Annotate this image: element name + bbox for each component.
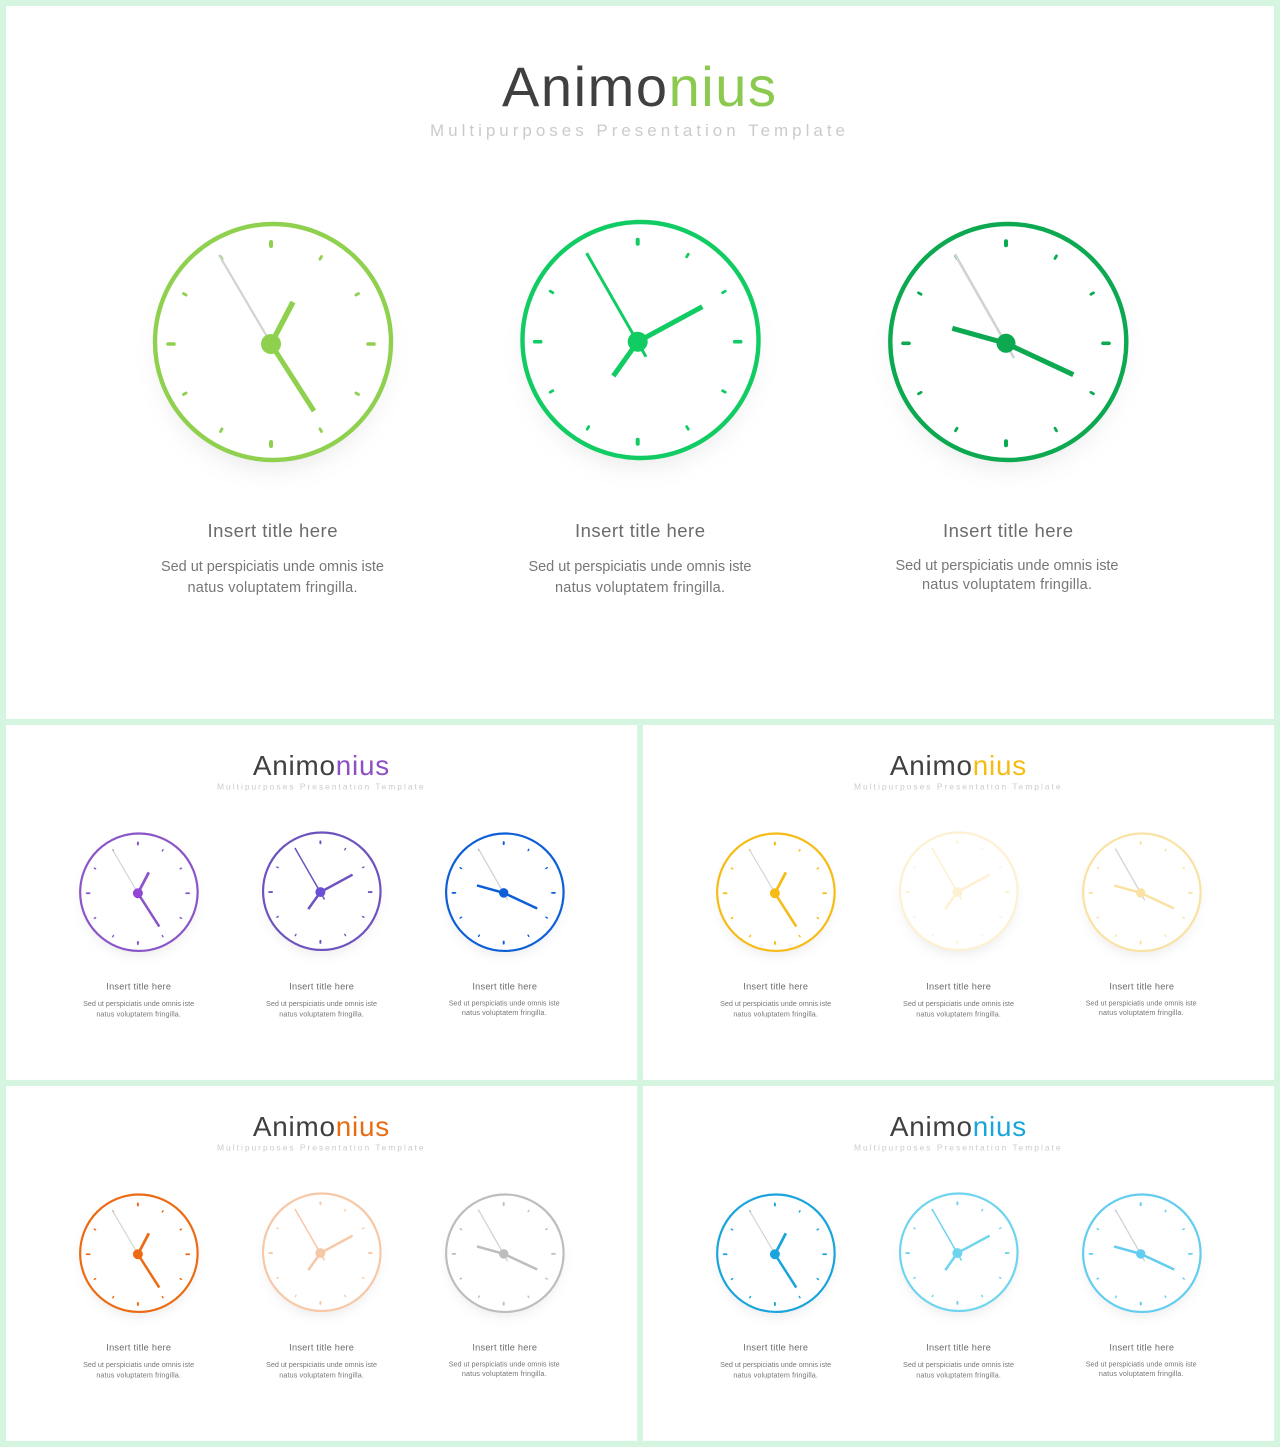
- caption 2: Insert title here: [575, 520, 705, 541]
- panel: yellow slide: [643, 725, 1274, 1080]
- caption 1: Sed ut perspiciatis unde omnis iste: [720, 1360, 831, 1369]
- caption 2: Sed ut perspiciatis unde omnis iste: [903, 999, 1014, 1008]
- subtitle: Multipurposes Presentation Template: [430, 121, 845, 140]
- caption 2: [903, 981, 1014, 1019]
- caption 2: Insert title here: [289, 1342, 354, 1352]
- clock: grey: [446, 1194, 564, 1314]
- caption 3: [896, 520, 1118, 593]
- clock: emerald: [522, 222, 758, 462]
- caption 1: [720, 1342, 831, 1380]
- caption 2: [528, 520, 752, 596]
- caption 1: [83, 981, 194, 1019]
- caption 3: Sed ut perspiciatis unde omnis iste: [896, 558, 1118, 574]
- caption 2: Sed ut perspiciatis unde omnis iste: [266, 999, 377, 1008]
- title: Animonius: [890, 1111, 1026, 1142]
- caption 1: Insert title here: [106, 1342, 171, 1352]
- clock: light blue: [1083, 1194, 1201, 1314]
- caption 1: Sed ut perspiciatis unde omnis iste: [83, 1360, 194, 1369]
- clock: dark green: [890, 224, 1126, 463]
- clock: violet: [80, 833, 198, 953]
- caption 2: [903, 1342, 1014, 1380]
- caption 3: [1086, 1342, 1197, 1378]
- caption 3: Insert title here: [472, 1342, 537, 1352]
- caption 2: Sed ut perspiciatis unde omnis iste: [903, 1360, 1014, 1369]
- caption 2: [266, 981, 377, 1019]
- caption 2: natus voluptatem fringilla.: [916, 1371, 1001, 1380]
- caption 1: natus voluptatem fringilla.: [96, 1010, 181, 1019]
- panel: blue slide: [643, 1086, 1274, 1441]
- clock: pale yellow: [1083, 833, 1201, 953]
- caption 3: natus voluptatem fringilla.: [462, 1369, 547, 1378]
- caption 1: Insert title here: [743, 1342, 808, 1352]
- subtitle: Multipurposes Presentation Template: [854, 782, 1061, 792]
- caption 3: Sed ut perspiciatis unde omnis iste: [449, 999, 560, 1008]
- subtitle: Multipurposes Presentation Template: [854, 1143, 1061, 1153]
- caption 1: natus voluptatem fringilla.: [188, 580, 358, 596]
- caption 1: natus voluptatem fringilla.: [96, 1371, 181, 1380]
- caption 3: Insert title here: [1109, 981, 1174, 991]
- caption 3: [1086, 981, 1197, 1017]
- caption 1: natus voluptatem fringilla.: [733, 1371, 818, 1380]
- caption 3: natus voluptatem fringilla.: [1099, 1369, 1184, 1378]
- caption 1: natus voluptatem fringilla.: [733, 1010, 818, 1019]
- title: Animonius: [253, 750, 389, 781]
- caption 3: Insert title here: [943, 520, 1073, 541]
- title: Animonius: [890, 750, 1026, 781]
- caption 2: natus voluptatem fringilla.: [279, 1371, 364, 1380]
- caption 3: natus voluptatem fringilla.: [1099, 1008, 1184, 1017]
- caption 3: Sed ut perspiciatis unde omnis iste: [449, 1360, 560, 1369]
- clock: orange: [80, 1194, 198, 1314]
- caption 1: [720, 981, 831, 1019]
- caption 3: Insert title here: [472, 981, 537, 991]
- caption 2: Insert title here: [289, 981, 354, 991]
- clock: blue: [446, 833, 564, 953]
- subtitle: Multipurposes Presentation Template: [217, 1143, 424, 1153]
- caption 1: Insert title here: [743, 981, 808, 991]
- clock: light cyan: [900, 1194, 1018, 1313]
- caption 3: [449, 1342, 560, 1378]
- caption 1: Sed ut perspiciatis unde omnis iste: [83, 999, 194, 1008]
- clock: light green: [155, 224, 391, 464]
- caption 1: Insert title here: [106, 981, 171, 991]
- caption 1: Insert title here: [208, 520, 338, 541]
- caption 2: [266, 1342, 377, 1380]
- title: Animonius: [253, 1111, 389, 1142]
- caption 1: [83, 1342, 194, 1380]
- caption 1: [161, 520, 384, 596]
- caption 1: Sed ut perspiciatis unde omnis iste: [720, 999, 831, 1008]
- caption 3: [449, 981, 560, 1017]
- clock: pale cream: [900, 833, 1018, 952]
- subtitle: Multipurposes Presentation Template: [217, 782, 424, 792]
- caption 2: Insert title here: [926, 981, 991, 991]
- panel: main green slide: [6, 6, 1274, 719]
- caption 3: Insert title here: [1109, 1342, 1174, 1352]
- caption 3: Sed ut perspiciatis unde omnis iste: [1086, 1360, 1197, 1369]
- clock: indigo: [263, 833, 381, 952]
- panel: orange slide: [6, 1086, 637, 1441]
- clock: sky blue: [717, 1194, 835, 1314]
- caption 2: natus voluptatem fringilla.: [916, 1010, 1001, 1019]
- clock: peach: [263, 1194, 381, 1313]
- caption 3: natus voluptatem fringilla.: [922, 577, 1092, 593]
- caption 2: Sed ut perspiciatis unde omnis iste: [266, 1360, 377, 1369]
- caption 2: natus voluptatem fringilla.: [555, 580, 725, 596]
- caption 1: Sed ut perspiciatis unde omnis iste: [161, 559, 384, 575]
- caption 3: Sed ut perspiciatis unde omnis iste: [1086, 999, 1197, 1008]
- clock: amber: [717, 833, 835, 953]
- caption 2: natus voluptatem fringilla.: [279, 1010, 364, 1019]
- panel: purple slide: [6, 725, 637, 1080]
- caption 2: Insert title here: [926, 1342, 991, 1352]
- title: Animonius: [502, 55, 776, 118]
- caption 3: natus voluptatem fringilla.: [462, 1008, 547, 1017]
- caption 2: Sed ut perspiciatis unde omnis iste: [528, 559, 752, 575]
